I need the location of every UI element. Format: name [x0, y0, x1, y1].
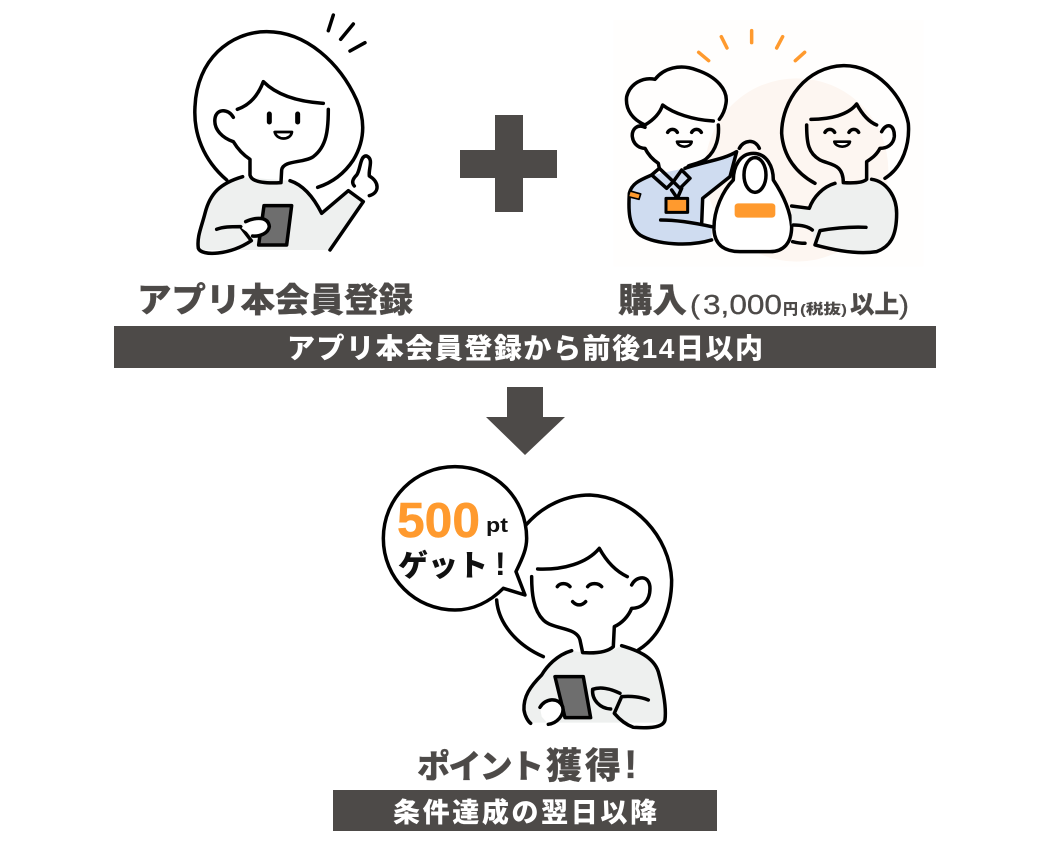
bubble text: get: ゲット — [398, 549, 488, 583]
heading: purchase condition: (税抜) — [800, 301, 847, 317]
heading: purchase condition: 円 — [783, 301, 798, 318]
banner: day after conditions met — [333, 790, 717, 831]
heading: points earned: 獲得 — [546, 745, 621, 786]
heading: purchase condition: 以上 — [850, 291, 899, 319]
banner: day after conditions met: 条件達成の翌日以降 — [393, 797, 657, 828]
heading: purchase condition — [618, 282, 909, 320]
banner: within 14 days: アプリ本会員登録から前後14日以内 — [287, 333, 763, 364]
heading: app registration: アプリ本会員登録 — [137, 282, 413, 320]
speech bubble — [383, 467, 527, 610]
heading: purchase condition: ( — [690, 290, 700, 320]
heading: purchase condition: 購入 — [618, 282, 687, 320]
illustration: staff handing bag to customer — [613, 20, 923, 267]
arrow: down — [486, 387, 565, 455]
heading: points earned: ポイント — [417, 748, 544, 785]
heading: purchase condition: 3,000 — [703, 289, 782, 320]
heading: points earned — [417, 743, 637, 787]
heading: purchase condition: ) — [899, 290, 909, 320]
plus sign — [460, 115, 557, 212]
banner: within 14 days — [114, 326, 936, 368]
illustration: happy person with phone — [383, 467, 672, 728]
bubble text: 500 pt: 500 — [397, 494, 480, 548]
illustration: woman pointing with phone — [195, 15, 377, 253]
heading: points earned: ! — [624, 743, 637, 787]
bubble text: 500 pt: pt — [486, 515, 508, 537]
bubble text: get: ! — [495, 546, 506, 582]
